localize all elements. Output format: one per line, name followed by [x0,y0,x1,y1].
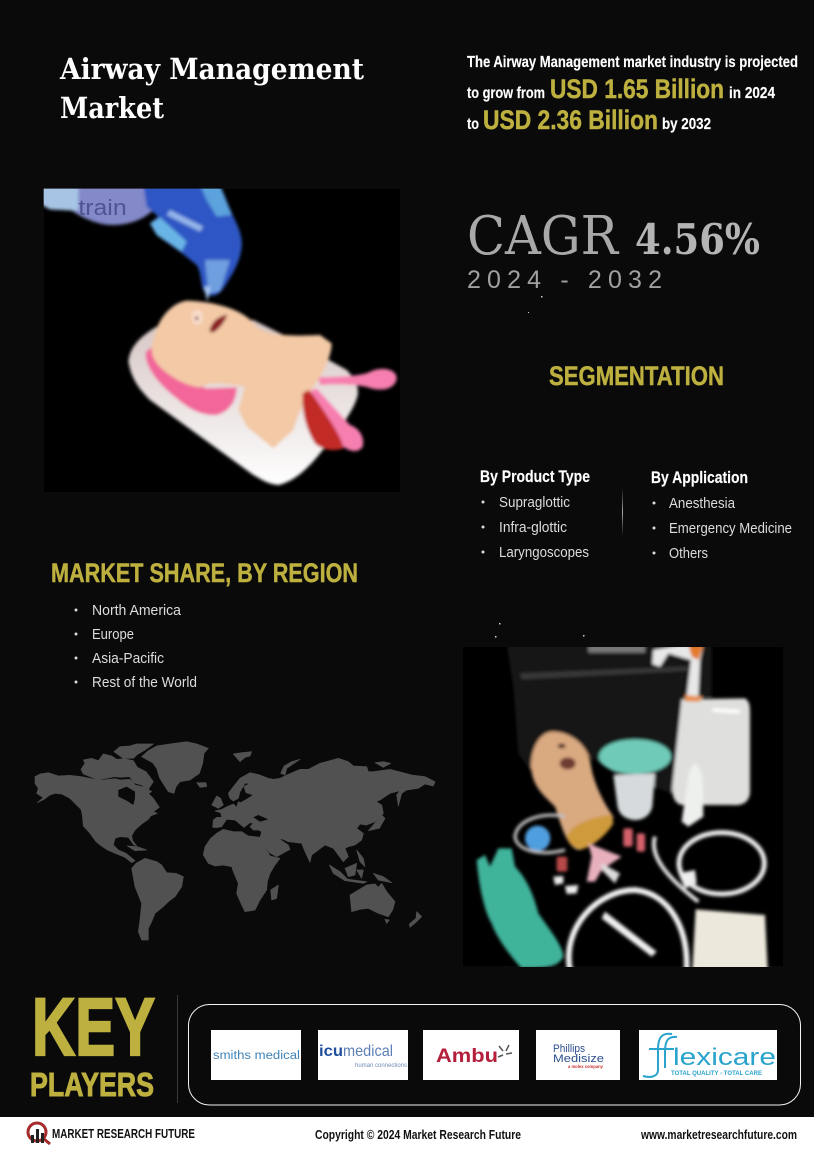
segmentation: by product type: Supraglottic [499,495,570,511]
logo: Ambu: Ambu [436,1046,498,1067]
logo: Phillips Medisize: Phillips [553,1043,585,1055]
icon: market research future logo [28,1123,50,1144]
footer brand name: MARKET RESEARCH FUTURE [52,1127,195,1141]
logo: Phillips Medisize [536,1030,620,1080]
key players heading: KEY [32,982,155,1073]
market size summary text: by 2032 [662,116,711,133]
logo: Phillips Medisize: Medisize [553,1053,604,1065]
CAGR callout: 2024 - 2032 [467,266,662,294]
market size summary text: to [467,116,479,133]
key players heading: PLAYERS [30,1066,154,1103]
specks [495,296,584,638]
footer [0,1117,814,1150]
region list [74,603,197,691]
segmentation: by product type: Infra-glottic [499,520,567,536]
logo: flexicare: lexicare [673,1044,776,1071]
region list: Europe [92,627,134,643]
segmentation: by application: Anesthesia [669,496,736,512]
title: Airway Management [59,52,365,86]
region list: Asia-Pacific [92,651,164,667]
logo: smiths medical [211,1030,301,1080]
CAGR callout: CAGR [467,206,620,267]
title [59,52,365,125]
logo: icu medical: human connections [355,1062,408,1069]
region list: Rest of the World [92,675,197,691]
market size summary text: USD 2.36 Billion [483,105,658,135]
title: Market [60,91,165,125]
photo: airway trainer manikin [40,185,400,492]
segmentation: by product type: By Product Type [480,468,590,486]
bag brand lettering: train [78,195,127,220]
copyright: Copyright © 2024 Market Research Future [315,1128,521,1142]
key players panel [188,1004,800,1105]
logo: Ambu [423,1030,519,1080]
segmentation: by product type: Laryngoscopes [499,545,589,561]
market size summary text: USD 1.65 Billion [550,74,724,104]
heading: segmentation: SEGMENTATION [549,361,724,391]
segmentation: by application: Emergency Medicine [669,521,792,537]
logo: icu medical: medical [343,1043,393,1060]
CAGR callout [467,206,760,294]
segmentation: by product type [480,468,590,561]
heading: market share by region: MARKET SHARE, BY REGION [51,558,358,588]
logo: flexicare: TOTAL QUALITY - TOTAL CARE [671,1070,763,1077]
market size summary text: in 2024 [729,85,775,102]
CAGR callout: 4.56% [635,215,760,264]
region list: North America [92,603,182,619]
logo: flexicare [639,1030,777,1080]
logo: Phillips Medisize: a molex company [568,1064,603,1069]
segmentation: by application [651,469,792,562]
market size summary text [467,54,798,135]
logo: smiths medical: smiths medical [213,1050,300,1062]
segmentation: by application: By Application [651,469,748,487]
market size summary text: to grow from [467,85,545,102]
logo: icu medical: icu [319,1043,343,1060]
segmentation: by application: Others [669,546,708,562]
photo: airway training kit [463,643,783,970]
logo: icu medical [318,1030,408,1080]
key players heading [30,982,155,1103]
world map [35,742,435,940]
